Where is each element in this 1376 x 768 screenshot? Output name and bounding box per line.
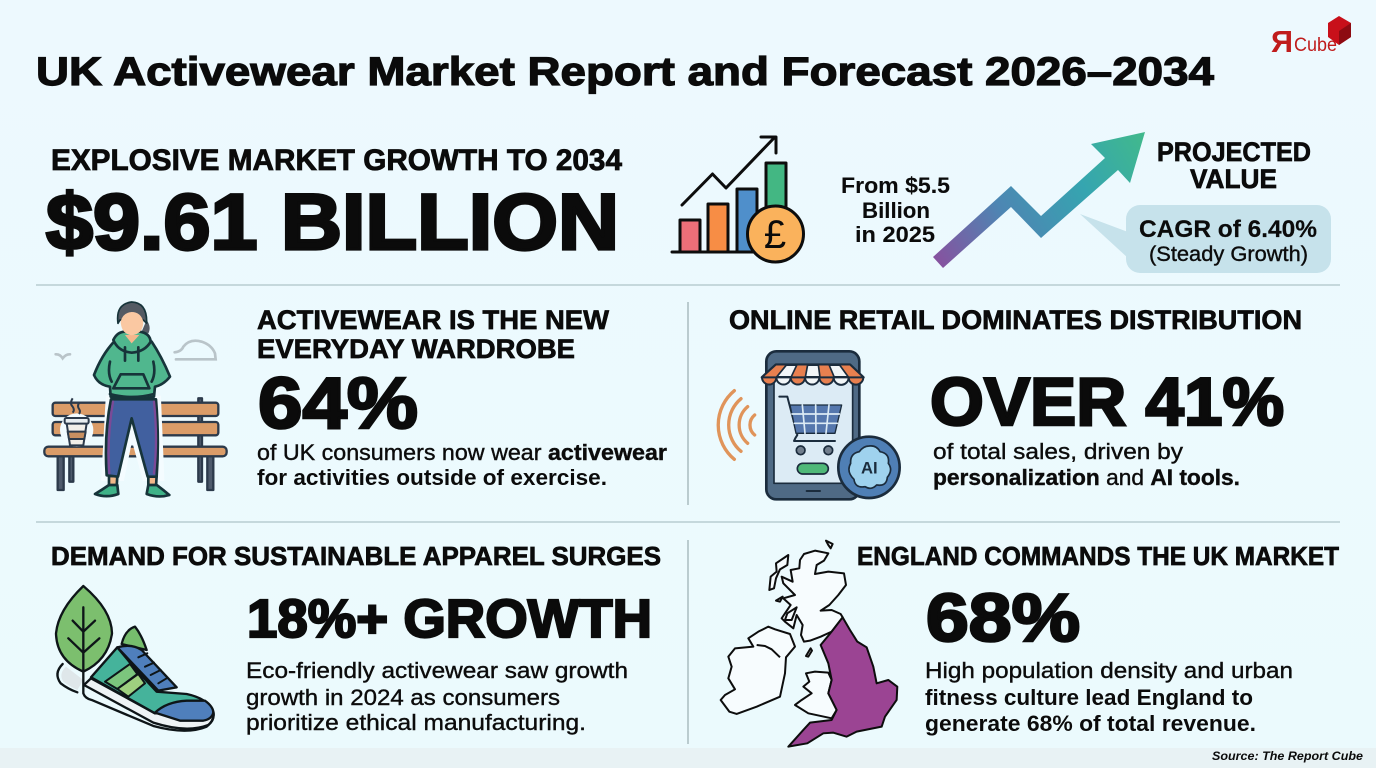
- text: eco-friendly: growth in 2024 as consumers: [246, 685, 560, 710]
- big number: 68 percent: 68%: [926, 580, 1080, 656]
- text: total sales: of total sales, driven by: [933, 439, 1184, 464]
- heading: activewear new everyday wardrobe: EVERYDAY WARDROBE: [257, 334, 575, 364]
- callout: CAGR: CAGR of 6.40%: [1139, 216, 1317, 243]
- heading: sustainable apparel: DEMAND FOR SUSTAINABLE APPAREL SURGES: [51, 543, 661, 571]
- logo: RCube: [1271, 16, 1351, 59]
- icon: bar chart with pound coin: £: [764, 213, 786, 257]
- icon: bar chart with pound coin: [672, 137, 804, 262]
- icon: person in hoodie at bench: [44, 302, 227, 496]
- logo: RCube: Я: [1271, 24, 1293, 59]
- text: from 5.5 billion in 2025: [841, 173, 950, 247]
- logo: RCube: Cube: [1294, 35, 1337, 56]
- source note: Source: The Report Cube: [1212, 749, 1363, 763]
- text: eco-friendly: prioritize ethical manufacturing.: [246, 710, 586, 735]
- big number: 64 percent: 64%: [258, 364, 418, 444]
- map: UK and Ireland with England highlighted: [721, 541, 897, 747]
- text: projected value: [1157, 137, 1311, 194]
- text: consumers wear activewear: [257, 440, 667, 490]
- callout: CAGR: (Steady Growth): [1149, 243, 1308, 266]
- text: population density: generate 68% of total revenue.: [925, 711, 1256, 736]
- text: population density: fitness culture lead England to: [925, 685, 1253, 710]
- text: population density: High population density and urban: [925, 658, 1293, 683]
- text: from 5.5 billion in 2025: in 2025: [855, 222, 935, 247]
- icon: phone with shopping cart and AI badge: [718, 351, 900, 499]
- big number: 18 percent growth: 18%+ GROWTH: [247, 589, 652, 649]
- big number: over 41 percent: OVER 41%: [930, 364, 1284, 440]
- text: eco-friendly: [246, 658, 628, 735]
- icon: leaf and running shoe: [56, 586, 214, 731]
- callout: CAGR: [1080, 205, 1331, 273]
- text: projected value: VALUE: [1190, 164, 1277, 194]
- arrow: growth: [933, 132, 1145, 268]
- heading: explosive market growth: EXPLOSIVE MARKET GROWTH TO 2034: [51, 144, 622, 177]
- heading: activewear new everyday wardrobe: [257, 305, 610, 364]
- text: consumers wear activewear: of UK consumers now wear activewear: [257, 440, 667, 465]
- icon: phone with shopping cart and AI badge: AI: [861, 458, 878, 477]
- heading: england commands: ENGLAND COMMANDS THE UK MARKET: [857, 543, 1339, 571]
- title: UK Activewear Market Report and Forecast 2026–2034: [36, 50, 1215, 94]
- text: consumers wear activewear: for activities outside of exercise.: [257, 465, 607, 490]
- text: projected value: PROJECTED: [1157, 137, 1311, 167]
- heading: online retail: ONLINE RETAIL DOMINATES DISTRIBUTION: [729, 305, 1302, 335]
- text: total sales: personalization and AI tools.: [933, 465, 1240, 490]
- heading: activewear new everyday wardrobe: ACTIVEWEAR IS THE NEW: [257, 305, 610, 335]
- text: from 5.5 billion in 2025: From $5.5: [841, 173, 950, 198]
- text: population density: [925, 658, 1293, 736]
- big number: 9.61 billion: $9.61 BILLION: [46, 177, 619, 266]
- text: eco-friendly: Eco-friendly activewear saw growth: [246, 658, 628, 683]
- text: from 5.5 billion in 2025: Billion: [862, 198, 930, 223]
- text: total sales: [933, 439, 1240, 490]
